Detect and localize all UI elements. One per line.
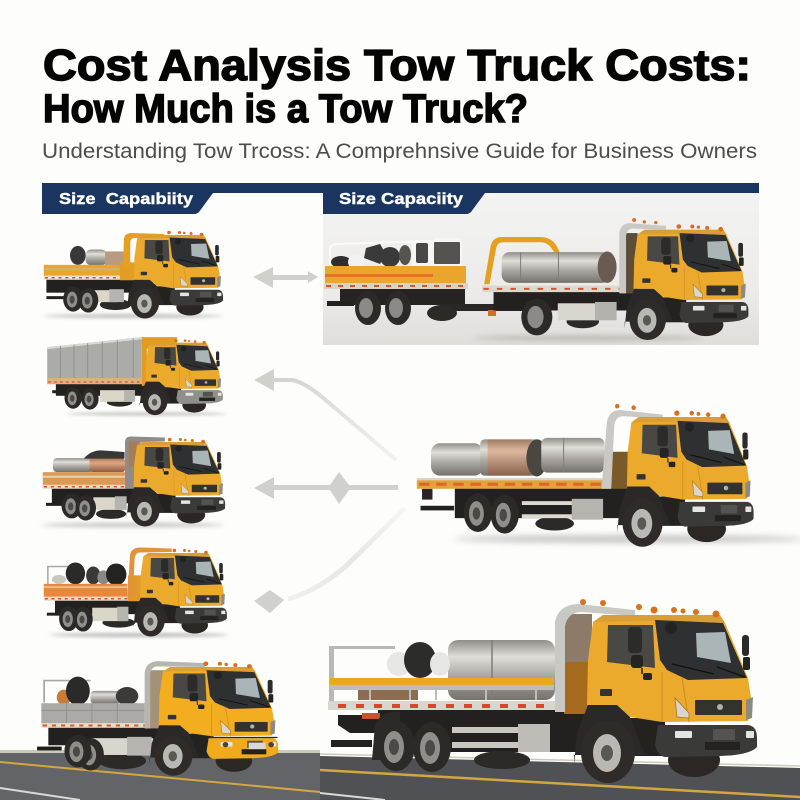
panel truck cargo tank bbox=[484, 237, 617, 284]
truck 1: flatbed with cargo bbox=[44, 231, 223, 319]
truck 1 cargo bbox=[70, 246, 124, 265]
arrow: double arrow row 1 bbox=[253, 267, 318, 288]
truck 1 chassis and rear wheels bbox=[46, 279, 135, 313]
middle truck cargo tanks bbox=[431, 438, 605, 476]
trailer bed bbox=[324, 266, 468, 289]
truck 5 cargo bbox=[44, 677, 138, 705]
middle truck chassis and rear wheels bbox=[421, 487, 630, 534]
truck 4 chassis and rear wheels bbox=[47, 599, 143, 632]
trailer cargo bbox=[330, 241, 433, 269]
trailer wheels and chassis bbox=[327, 289, 540, 325]
truck 5 chassis and rear wheels bbox=[37, 726, 164, 770]
truck 3: flatbed with tanks bbox=[41, 436, 225, 527]
truck in panel: flatbed tow bbox=[473, 218, 748, 341]
road bbox=[0, 750, 800, 800]
truck 2 cargo box bbox=[47, 337, 177, 386]
trailer in panel bbox=[324, 238, 540, 325]
large truck chassis and rear wheels bbox=[331, 710, 593, 772]
arrow: diamond arrow row 3 bbox=[254, 472, 398, 504]
panel truck chassis and wheels bbox=[494, 291, 636, 335]
truck 2 chassis and rear wheels bbox=[52, 383, 147, 410]
truck 5 bed and frame bbox=[41, 661, 205, 728]
header band bbox=[42, 183, 759, 214]
large truck cargo bbox=[358, 640, 555, 700]
arrow: curved arrow row 2 bbox=[254, 369, 396, 460]
truck: middle large flatbed bbox=[417, 404, 800, 547]
title: How Much is a Tow Truck? bbox=[43, 87, 528, 131]
truck 4: flatbed with coils bbox=[44, 548, 228, 637]
trailer cabin bbox=[412, 238, 462, 266]
subtitle: Understanding Tow Trcoss: A Comprehnsive Guide for Business Owners bbox=[42, 140, 757, 163]
truck 5: gray bed on road bbox=[37, 661, 278, 776]
panel: top right comparison background bbox=[323, 193, 759, 345]
truck 3 bed bbox=[43, 436, 165, 489]
truck 4 bed and frame bbox=[44, 548, 172, 601]
truck: large bottom flatbed bbox=[328, 599, 757, 783]
heading: size capability: Size Capaıbiity bbox=[59, 191, 193, 208]
large truck bed and rails bbox=[328, 646, 556, 710]
heading: size capacity bbox=[323, 183, 759, 214]
heading: size capacity: Size Capaciity bbox=[339, 191, 463, 208]
truck 1 bed and frame bbox=[44, 233, 164, 280]
truck 4 cargo bbox=[48, 562, 126, 585]
truck 3 cargo tanks bbox=[53, 450, 125, 472]
middle truck bed and post bbox=[417, 404, 663, 489]
truck 5 bumper details bbox=[210, 737, 278, 749]
arrow: curved diamond arrow row 4 bbox=[254, 508, 405, 613]
heading: size capability bbox=[42, 183, 323, 214]
panel truck bed bbox=[482, 218, 666, 293]
title: Cost Analysis Tow Truck Costs: bbox=[43, 41, 751, 90]
large truck headboard bbox=[555, 599, 642, 714]
truck 3 chassis and rear wheels bbox=[46, 488, 138, 520]
title bbox=[43, 41, 751, 131]
truck 2: box truck bbox=[47, 337, 226, 416]
